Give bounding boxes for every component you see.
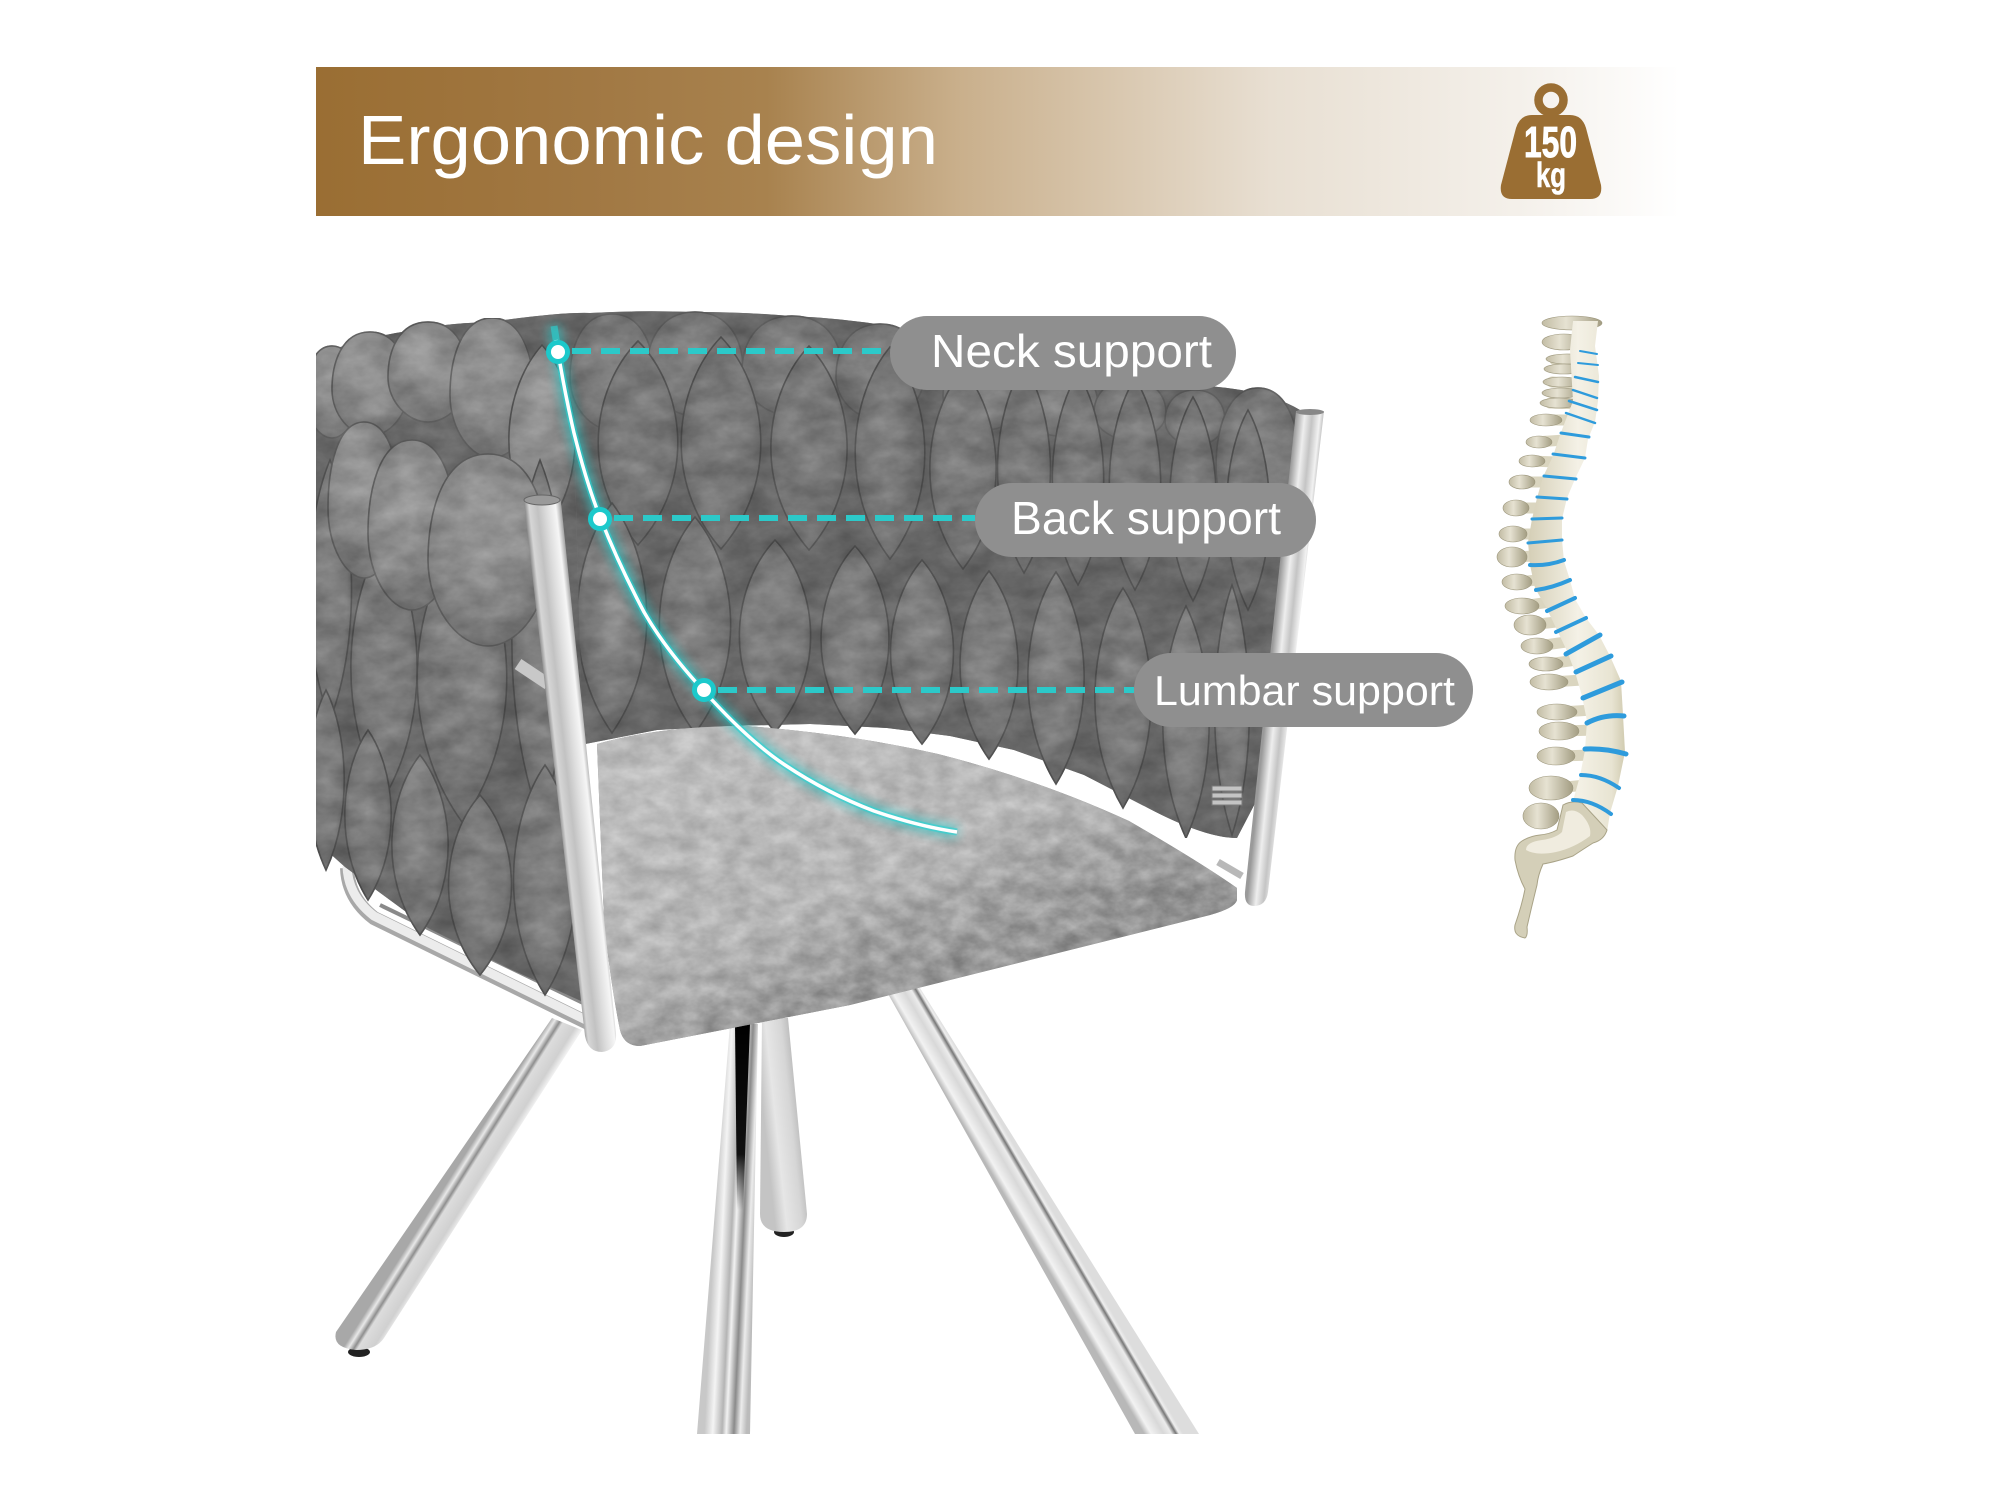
leg: right [887,980,1199,1434]
header banner [316,67,1680,216]
callout: lumbar support [694,653,1473,727]
woven left arm panel [306,318,590,1005]
spinous processes [1497,316,1602,829]
callout: back support: Back support [1011,492,1281,544]
leg: rear short [760,1018,807,1237]
woven back panel [480,311,1300,838]
back top lobes [570,312,1300,532]
callout: neck support [548,316,1236,390]
callout: lumbar support: Lumbar support [1154,667,1455,714]
back woven lower row [577,503,1249,838]
chrome right post [1245,409,1324,906]
arm lower weave [308,460,576,995]
back woven upper row [598,337,1270,610]
callout: neck support: Neck support [931,325,1212,377]
title: Ergonomic design [358,101,938,179]
chrome left inner bar [518,664,548,684]
chrome seat bracket right [1218,862,1242,876]
vertebral column [1528,321,1625,832]
spine curve overlay [554,326,957,832]
chrome lower rail [347,866,590,1024]
seat cushion [597,726,1237,1046]
chrome left post [524,495,616,1052]
icon: 150 kg weight [1501,88,1601,199]
leg: left [335,1018,582,1357]
callout: back support [590,483,1316,557]
icon: 150 kg weight: 150 [1524,118,1577,167]
arm rear lobes [316,318,576,505]
intervertebral discs [1528,351,1626,814]
back base [480,311,1300,838]
icon: 150 kg weight: kg [1536,156,1566,195]
chair legs [335,980,1199,1434]
sacrum and coccyx [1515,802,1607,938]
arm top lobes [328,422,548,646]
banner gradient bar [316,67,1680,216]
small strap at right [1212,786,1242,805]
arm base [316,322,590,1005]
connecting pedicles [1512,342,1594,788]
leg: front middle [697,1024,758,1434]
spine illustration [1497,316,1626,938]
chair illustration [306,311,1324,1434]
